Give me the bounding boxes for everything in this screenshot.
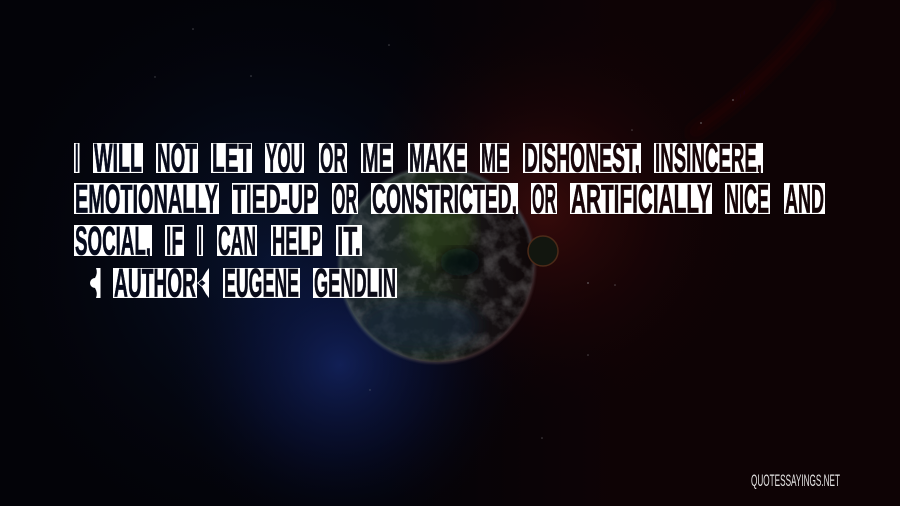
- author label: AUTHOR: [114, 262, 196, 306]
- quote line 1: I: [75, 136, 78, 180]
- text: GENDLIN: [314, 262, 396, 306]
- quote line 2: EMOTIONALLY: [75, 178, 218, 222]
- text: AND: [785, 178, 824, 222]
- quote line 3: IF: [166, 220, 183, 264]
- planet earth: [340, 168, 534, 362]
- quote line 1: MAKE: [409, 136, 466, 180]
- quote line 1: [74, 136, 763, 180]
- quote line 2: OR: [333, 178, 357, 222]
- quote line 2: NICE: [726, 178, 769, 222]
- icon: bullet: [90, 268, 100, 298]
- quote line 3: SOCIAL,: [75, 220, 151, 264]
- quote line 3: HELP: [272, 220, 321, 264]
- quote text: INSINCERE,: [655, 136, 762, 180]
- quote text: [74, 136, 825, 264]
- quote line 2: ARTIFICIALLY: [571, 178, 711, 222]
- quote line 3: I: [198, 220, 202, 264]
- quote line 2: CONSTRICTED,: [372, 178, 517, 222]
- quote line 1: YOU: [266, 136, 303, 180]
- quote line 1: ME: [481, 136, 508, 180]
- quote line 2: [74, 178, 825, 222]
- stars: [154, 28, 734, 439]
- author name: EUGENE: [224, 262, 299, 306]
- quote line 1: OR: [320, 136, 346, 180]
- quote line 1: WILL: [94, 136, 142, 180]
- quote line 2: OR: [532, 178, 556, 222]
- author line: [113, 262, 397, 306]
- quote line 3: IT.: [337, 220, 361, 264]
- quote line 3: CAN: [218, 220, 256, 264]
- quote line 3: [74, 220, 362, 264]
- author label: [113, 262, 209, 306]
- quote line 2: TIED-UP: [233, 178, 317, 222]
- quote line 1: LET: [212, 136, 251, 180]
- quote line 1: ME: [362, 136, 392, 180]
- quote line 1: NOT: [157, 136, 197, 180]
- quote line 1: DISHONEST,: [524, 136, 640, 180]
- moon: [528, 236, 558, 266]
